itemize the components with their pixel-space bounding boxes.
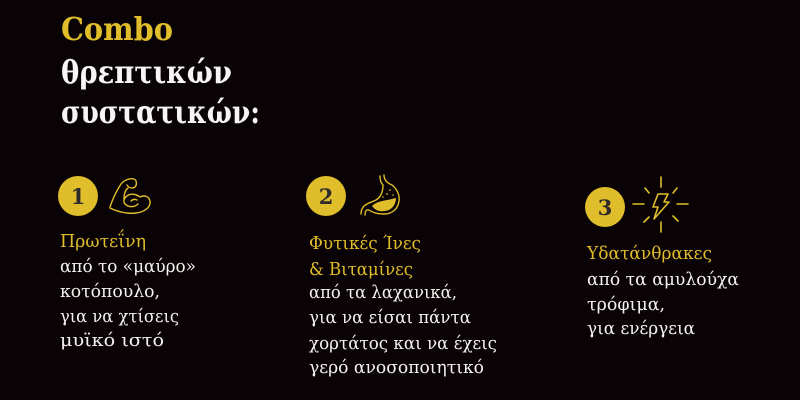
title: Combo bbox=[61, 10, 173, 48]
description: protein bbox=[60, 256, 196, 351]
label: fibre and vitamins bbox=[309, 233, 421, 280]
number badge 1 bbox=[58, 176, 98, 216]
label: protein: Πρωτεΐνη bbox=[60, 227, 146, 252]
description: protein: για να χτίσεις bbox=[60, 306, 179, 327]
description: carbohydrates: τρόφιμα, bbox=[587, 294, 665, 315]
description: fibre and vitamins: από τα λαχανικά, bbox=[309, 282, 457, 303]
description: fibre and vitamins bbox=[309, 282, 497, 378]
number badge 2 bbox=[306, 176, 346, 216]
number badge 2: 2 bbox=[319, 184, 333, 209]
panel: carbohydrates bbox=[585, 177, 739, 339]
title bbox=[61, 10, 260, 131]
description: carbohydrates: από τα αμυλούχα bbox=[587, 269, 739, 290]
title: συστατικών: bbox=[61, 93, 260, 131]
title: θρεπτικών bbox=[61, 53, 232, 91]
description: fibre and vitamins: γερό ανοσοποιητικό bbox=[309, 357, 484, 378]
description: carbohydrates bbox=[587, 269, 739, 339]
description: protein: μυϊκό ιστό bbox=[60, 330, 164, 351]
panel: fibre and vitamins bbox=[306, 175, 497, 378]
panel: protein bbox=[58, 176, 196, 351]
description: protein: κοτόπουλο, bbox=[60, 281, 160, 302]
icon: lightning burst bbox=[633, 177, 688, 232]
icon: flexed arm bbox=[110, 179, 150, 213]
label: carbohydrates: Υδατάνθρακες bbox=[586, 243, 712, 264]
label: fibre and vitamins: & Βιταμίνες bbox=[309, 259, 413, 280]
number badge 3: 3 bbox=[598, 195, 612, 220]
description: fibre and vitamins: χορτάτος και να έχεις bbox=[309, 333, 497, 354]
label: fibre and vitamins: Φυτικές Ίνες bbox=[309, 233, 421, 254]
description: protein: από το «μαύρο» bbox=[60, 256, 196, 277]
number badge 1: 1 bbox=[71, 184, 85, 209]
number badge 3 bbox=[585, 187, 625, 227]
icon: stomach bbox=[361, 175, 399, 215]
description: carbohydrates: για ενέργεια bbox=[587, 318, 695, 339]
description: fibre and vitamins: για να είσαι πάντα bbox=[309, 307, 471, 328]
